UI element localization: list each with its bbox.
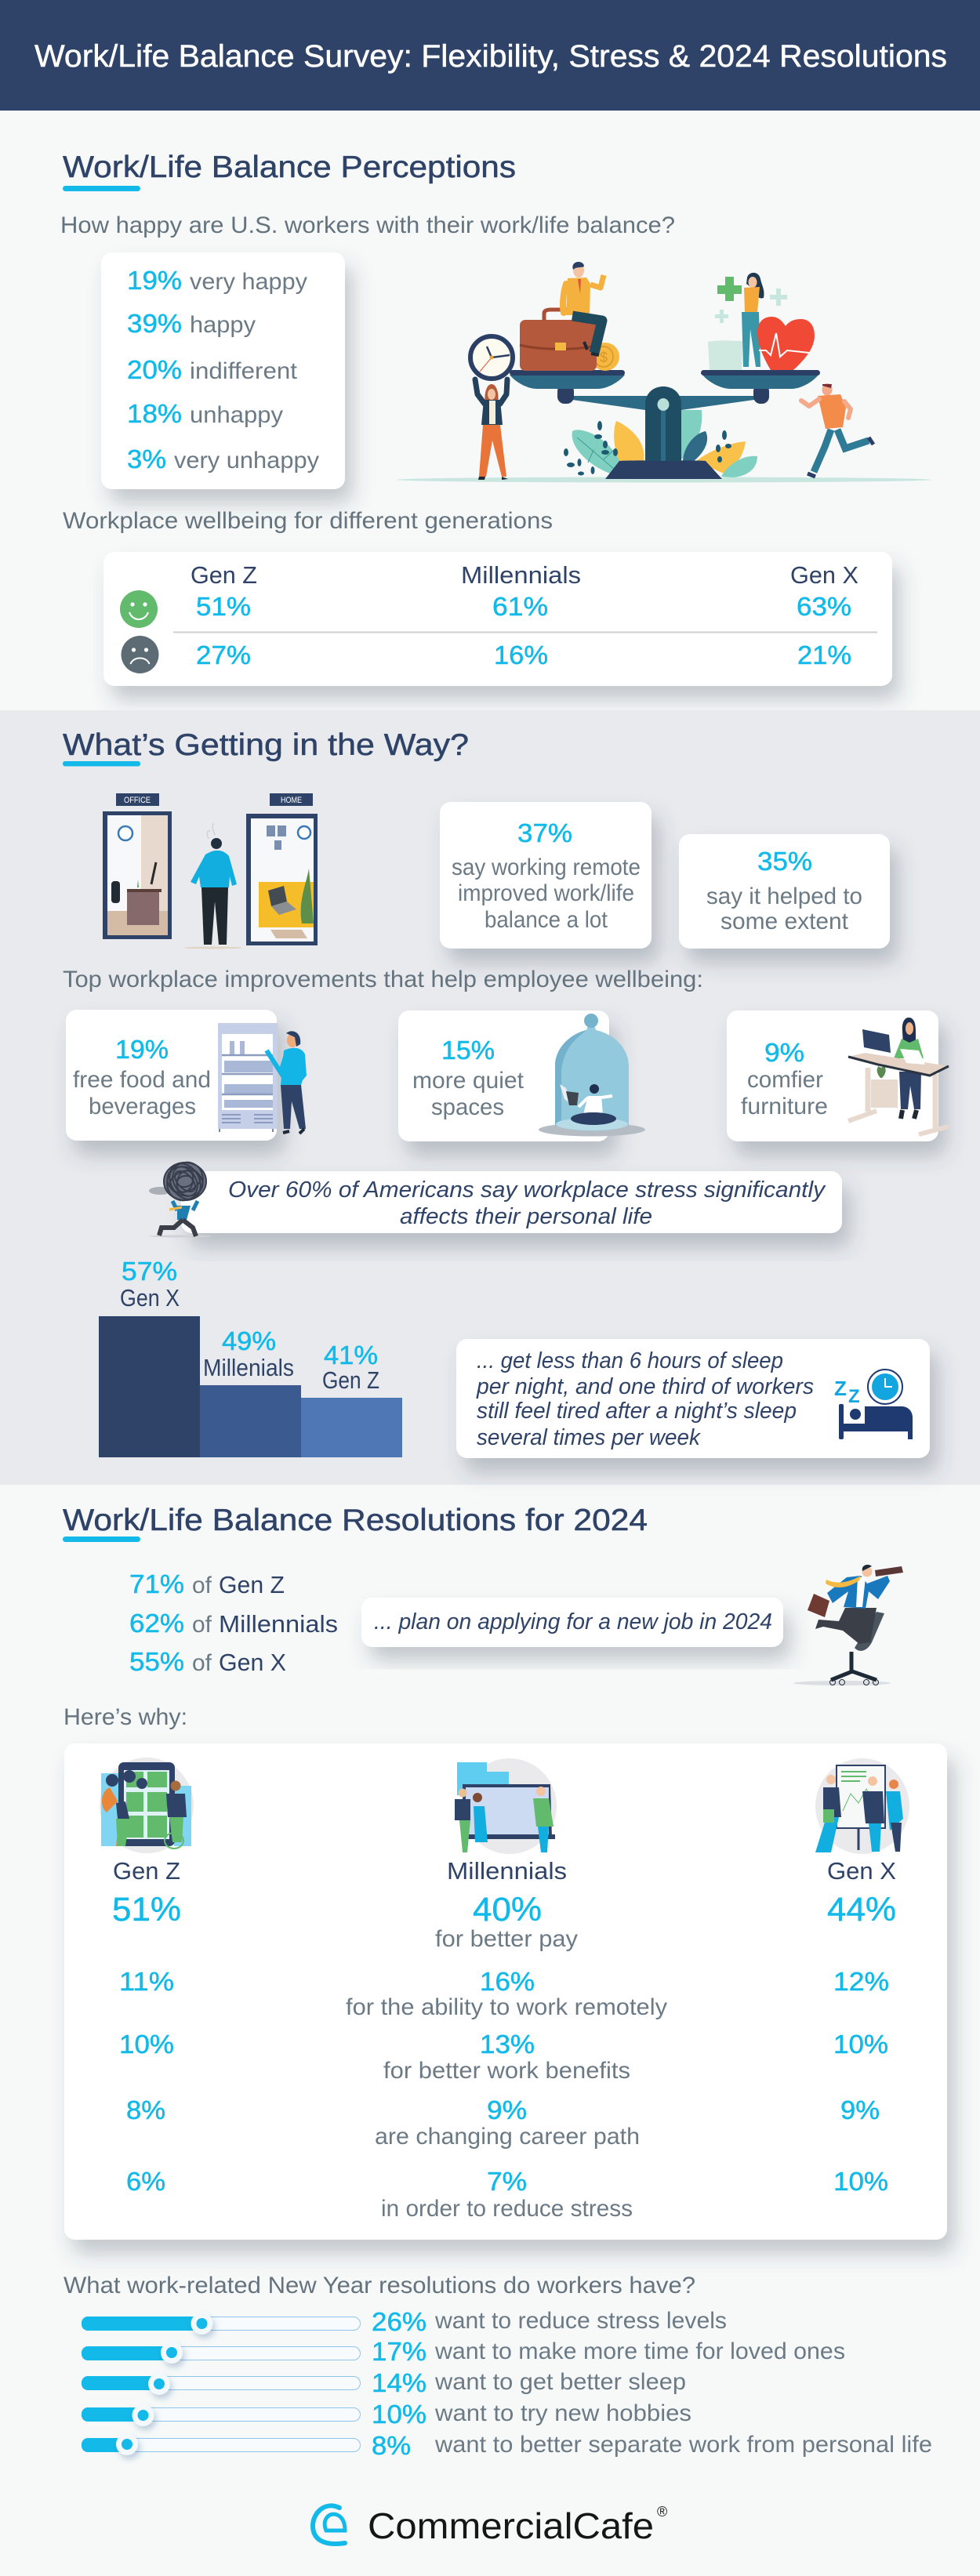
- bar chart: sleep by generation: Gen Z: [322, 1366, 379, 1394]
- panel: wellbeing by generation table: 63%: [797, 592, 851, 621]
- panel: reasons by generation: 6%: [126, 2167, 165, 2196]
- panel: wellbeing by generation table: Gen Z: [191, 561, 257, 589]
- card: more quiet spaces: more quiet: [412, 1068, 524, 1094]
- bar chart: sleep by generation: [99, 1257, 402, 1457]
- chart: resolutions sliders: want to get better sleep: [434, 2369, 686, 2395]
- panel: wellbeing by generation table: 27%: [196, 640, 251, 669]
- list: job application shares by generation: [129, 1569, 338, 1676]
- worried man: [184, 823, 242, 949]
- panel: happiness list: 39%: [127, 309, 182, 338]
- bar chart: sleep by generation: Gen X: [120, 1284, 180, 1312]
- section heading: perceptions: Work/Life Balance Perceptions: [63, 151, 516, 184]
- logo: CommercialCafe: ®: [657, 2504, 667, 2520]
- label: workplace wellbeing: Workplace wellbeing for different generations: [63, 508, 553, 534]
- running man: [801, 383, 873, 477]
- header band: [0, 0, 980, 111]
- panel: reasons by generation: 10%: [833, 2030, 888, 2059]
- panel: reasons by generation: Gen Z: [113, 1857, 180, 1885]
- logo: CommercialCafe: CommercialCafe: [368, 2505, 654, 2546]
- heart: [757, 317, 815, 370]
- list: job application shares by generation: 71%: [129, 1569, 184, 1598]
- icon: man carrying stress scribble: [149, 1156, 212, 1237]
- slider: 8%: [82, 2433, 361, 2455]
- question: happiness: How happy are U.S. workers with their work/life balance?: [60, 212, 675, 238]
- list: job application shares by generation: Gen Z: [219, 1571, 285, 1598]
- illustration: Gen X at flip chart: [815, 1758, 909, 1854]
- panel: happiness list: 3%: [127, 444, 166, 473]
- panel: reasons by generation: Gen X: [827, 1857, 896, 1885]
- illustration: man with telescope on office chair: [793, 1565, 903, 1685]
- illustration: Millennials at screen: [455, 1758, 557, 1854]
- card: comfier furniture: furniture: [741, 1094, 828, 1119]
- card: comfier furniture: comfier: [747, 1067, 823, 1093]
- icon: happy face: [120, 590, 158, 628]
- callout: workplace stress: Over 60% of Americans say workplace stress significantly: [228, 1177, 826, 1203]
- card: more quiet spaces: spaces: [431, 1094, 504, 1120]
- woman holding clock: [475, 379, 508, 480]
- panel: reasons by generation: 16%: [480, 1967, 535, 1996]
- card: 37%: improved work/life: [458, 880, 634, 906]
- panel: happiness list: happy: [190, 312, 256, 338]
- coin: $: [600, 350, 608, 365]
- section heading: getting in the way: What’s Getting in the Way?: [63, 728, 469, 762]
- panel: reasons by generation: Millennials: [447, 1857, 567, 1885]
- card: 35%: some extent: [720, 909, 849, 934]
- slider: 10%: [82, 2404, 361, 2426]
- chart: resolutions sliders: want to reduce stress levels: [434, 2308, 727, 2334]
- panel: reasons by generation: 12%: [833, 1967, 889, 1996]
- illustration: standing desk with woman: [848, 1018, 949, 1134]
- panel: reasons by generation: [64, 1743, 947, 2240]
- card: comfier furniture: [727, 1010, 949, 1141]
- card: 35%: 35%: [757, 847, 812, 876]
- list: job application shares by generation: 62%: [129, 1609, 184, 1638]
- card: free food and beverages: beverages: [89, 1094, 196, 1119]
- panel: wellbeing by generation table: 51%: [196, 592, 251, 621]
- pillow: [708, 340, 742, 370]
- bar chart: sleep by generation: 41%: [324, 1341, 378, 1370]
- callout: sleep: per night, and one third of workers: [476, 1374, 814, 1399]
- list: job application shares by generation: of: [192, 1612, 212, 1638]
- icon: sleep and clock: Z: [848, 1386, 860, 1407]
- card: free food and beverages: 19%: [115, 1035, 169, 1064]
- slider: 17%: [82, 2342, 361, 2364]
- callout: sleep: ... get less than 6 hours of sleep: [477, 1348, 783, 1373]
- panel: wellbeing by generation table: 16%: [494, 640, 548, 669]
- panel: happiness list: unhappy: [190, 402, 283, 428]
- icon: sleep and clock: Z: [834, 1377, 847, 1400]
- woman holding plus sign: [715, 273, 787, 367]
- illustration: balance scale with workers: [397, 262, 931, 483]
- panel: reasons by generation: 13%: [480, 2030, 535, 2059]
- panel: reasons by generation: 10%: [119, 2030, 174, 2059]
- panel: wellbeing by generation table: Gen X: [790, 561, 858, 589]
- chart: resolutions sliders: [82, 2307, 932, 2460]
- chart: resolutions sliders: 10%: [372, 2400, 426, 2429]
- title: Work/Life Balance Survey: Flexibility, Stress & 2024 Resolutions: [34, 39, 947, 74]
- panel: reasons by generation: in order to reduce stress: [381, 2196, 633, 2222]
- chart: resolutions sliders: want to try new hobbies: [434, 2400, 691, 2426]
- list: job application shares by generation: Millennials: [219, 1610, 338, 1638]
- callout: workplace stress: affects their personal life: [400, 1204, 652, 1229]
- chart: resolutions sliders: 26%: [372, 2307, 426, 2336]
- bar chart: sleep by generation: Millenials: [203, 1354, 294, 1381]
- label: top workplace improvements: Top workplace improvements that help employee wellbeing:: [63, 967, 703, 992]
- man sitting on briefcase: [563, 262, 604, 355]
- panel: reasons by generation: 9%: [487, 2095, 527, 2124]
- callout: sleep: still feel tired after a night’s sleep: [477, 1399, 797, 1424]
- card: 37%: 37%: [517, 818, 572, 847]
- illustration: office or home doors: OFFICE: [124, 796, 151, 805]
- card: 35%: say it helped to: [706, 883, 862, 909]
- label: new year resolutions question: What work-related New Year resolutions do workers have?: [64, 2273, 695, 2298]
- chart: resolutions sliders: 17%: [372, 2337, 426, 2366]
- card: free food and beverages: [66, 1010, 307, 1141]
- chart: resolutions sliders: 8%: [372, 2431, 411, 2460]
- chart: resolutions sliders: want to better separate work from personal life: [434, 2432, 932, 2458]
- clock: [470, 336, 513, 379]
- panel: reasons by generation: are changing career path: [375, 2124, 640, 2150]
- illustration: Gen Z phone with apps: [100, 1758, 194, 1853]
- card: comfier furniture: 9%: [764, 1038, 804, 1067]
- panel: happiness list: 19%: [127, 266, 182, 295]
- list: job application shares by generation: of: [192, 1573, 212, 1598]
- coin: [591, 343, 619, 371]
- callout: sleep: several times per week: [477, 1425, 701, 1450]
- bar chart: sleep by generation: 57%: [122, 1257, 177, 1286]
- panel: happiness list: [101, 252, 345, 489]
- label: here's why: Here’s why:: [64, 1704, 187, 1730]
- callout: sleep: [456, 1339, 930, 1458]
- panel: reasons by generation: 11%: [119, 1967, 174, 1996]
- illustration: office or home doors: HOME: [281, 796, 302, 805]
- panel: wellbeing by generation table: [103, 552, 892, 686]
- panel: reasons by generation: 9%: [840, 2095, 880, 2124]
- card: free food and beverages: free food and: [73, 1067, 211, 1093]
- icon: sad face: [121, 636, 158, 673]
- panel: happiness list: indifferent: [190, 358, 298, 384]
- list: job application shares by generation: Gen X: [219, 1649, 286, 1676]
- illustration: bell jar with woman: [539, 1014, 645, 1137]
- list: job application shares by generation: 55%: [129, 1647, 184, 1676]
- panel: reasons by generation: 51%: [112, 1891, 181, 1928]
- panel: reasons by generation: 10%: [833, 2167, 888, 2196]
- slider: 14%: [82, 2373, 361, 2395]
- panel: happiness list: 20%: [127, 355, 182, 384]
- callout: workplace stress: [149, 1156, 842, 1237]
- panel: happiness list: 18%: [127, 399, 182, 428]
- card: 37%: say working remote: [452, 854, 641, 880]
- illustration: fridge and man: [218, 1023, 307, 1134]
- card: 37%: balance a lot: [485, 907, 608, 933]
- briefcase: [520, 310, 597, 371]
- panel: wellbeing by generation table: Millennials: [461, 561, 581, 589]
- panel: happiness list: very unhappy: [174, 448, 319, 473]
- panel: wellbeing by generation table: 21%: [797, 640, 851, 669]
- panel: reasons by generation: 8%: [126, 2095, 165, 2124]
- panel: reasons by generation: for better pay: [435, 1926, 578, 1952]
- panel: happiness list: very happy: [190, 269, 307, 295]
- panel: reasons by generation: for better work benefits: [383, 2058, 630, 2084]
- chart: resolutions sliders: want to make more time for loved ones: [434, 2338, 845, 2364]
- card: 35%: [679, 834, 890, 949]
- panel: reasons by generation: for the ability to work remotely: [346, 1994, 667, 2020]
- callout: plan on applying: [361, 1598, 783, 1647]
- chart: resolutions sliders: 14%: [372, 2368, 426, 2397]
- slider: 26%: [82, 2313, 361, 2335]
- icon: sleep and clock: [834, 1370, 913, 1439]
- card: more quiet spaces: [398, 1010, 645, 1141]
- section heading: resolutions: Work/Life Balance Resolutions for 2024: [63, 1504, 648, 1537]
- panel: wellbeing by generation table: 61%: [492, 592, 548, 621]
- callout: plan on applying: ... plan on applying for a new job in 2024: [374, 1609, 772, 1634]
- illustration: office or home doors: [103, 793, 318, 949]
- panel: reasons by generation: 40%: [473, 1891, 542, 1928]
- bar chart: sleep by generation: 49%: [222, 1326, 276, 1355]
- list: job application shares by generation: of: [192, 1650, 212, 1676]
- card: more quiet spaces: 15%: [441, 1036, 495, 1065]
- card: 37%: [440, 802, 652, 949]
- panel: reasons by generation: 44%: [827, 1891, 896, 1928]
- section background: what's getting in the way: [0, 710, 980, 1485]
- panel: reasons by generation: 7%: [487, 2167, 527, 2196]
